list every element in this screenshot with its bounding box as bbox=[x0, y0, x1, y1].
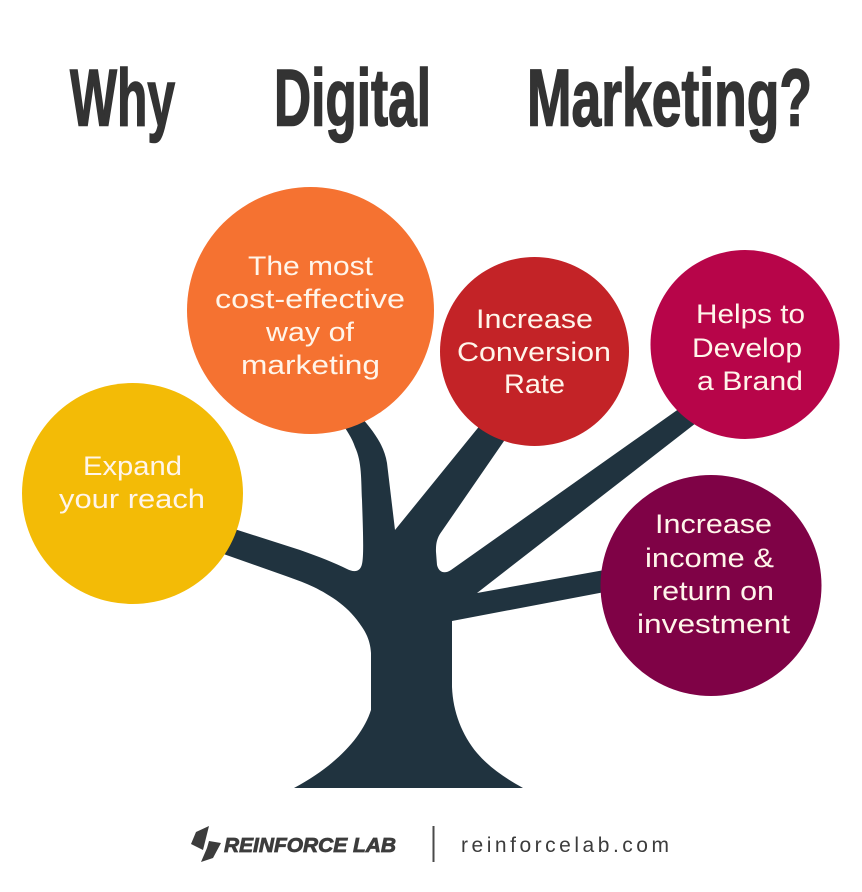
circle: helps to develop a brand: Helps to bbox=[696, 299, 805, 329]
circle: expand your reach bbox=[22, 383, 243, 604]
circle: increase income and ROI bbox=[600, 475, 822, 696]
circle: expand your reach: your reach bbox=[59, 484, 205, 514]
logo wordmark: REINFORCE LAB bbox=[224, 835, 396, 857]
circle: helps to develop a brand: Develop bbox=[692, 333, 802, 363]
tree trunk and branches bbox=[215, 401, 705, 788]
circle: most cost-effective: cost-effective bbox=[215, 284, 405, 314]
title: Digital bbox=[274, 54, 431, 144]
circle: most cost-effective: The most bbox=[248, 251, 374, 281]
circle: most cost-effective: marketing bbox=[241, 350, 380, 380]
circle: increase income and ROI: Increase bbox=[655, 509, 772, 539]
website url: reinforcelab.com bbox=[461, 834, 669, 857]
circle: increase income and ROI: return on bbox=[652, 576, 774, 606]
circle: helps to develop a brand bbox=[650, 250, 840, 439]
title: Why bbox=[70, 54, 175, 144]
title bbox=[70, 54, 812, 144]
circle: increase conversion rate bbox=[440, 257, 629, 446]
icon: reinforce lab mark bbox=[191, 826, 221, 862]
footer logo bbox=[191, 826, 396, 862]
circle: increase conversion rate: Rate bbox=[504, 369, 565, 399]
circle: increase conversion rate: Conversion bbox=[457, 337, 611, 367]
circle: increase income and ROI: income & bbox=[645, 543, 774, 573]
circle: increase income and ROI: investment bbox=[637, 609, 791, 639]
circle: helps to develop a brand: a Brand bbox=[697, 366, 803, 396]
circle: most cost-effective: way of bbox=[265, 317, 355, 347]
footer divider bbox=[432, 826, 434, 862]
circle: expand your reach: Expand bbox=[83, 451, 182, 481]
circle: most cost-effective bbox=[187, 187, 434, 434]
circle: increase conversion rate: Increase bbox=[476, 304, 593, 334]
